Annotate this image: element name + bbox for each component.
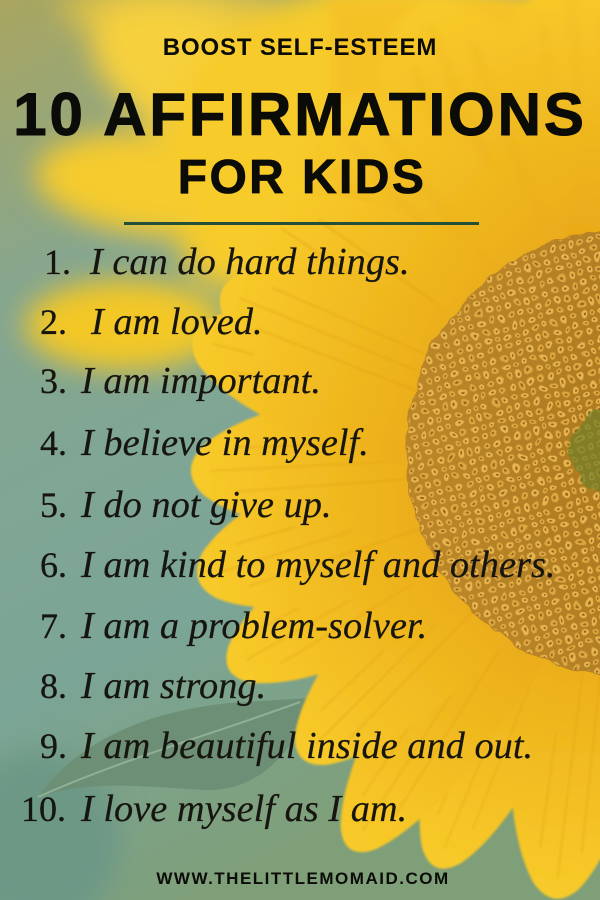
title line 1: 10 AFFIRMATIONS bbox=[13, 81, 587, 148]
item 5: 5. bbox=[40, 485, 67, 525]
item 3: 3. bbox=[40, 361, 67, 401]
item 7: 7. bbox=[40, 606, 67, 646]
front petals bbox=[175, 144, 600, 900]
title line 2: FOR KIDS bbox=[178, 151, 426, 204]
item 6: I am kind to myself and others. bbox=[81, 544, 555, 586]
item 3: I am important. bbox=[81, 360, 321, 402]
flower centre bbox=[406, 228, 600, 676]
item 6: 6. bbox=[40, 545, 67, 585]
subtitle: BOOST SELF-ESTEEM bbox=[163, 34, 437, 61]
item 8: I am strong. bbox=[81, 665, 266, 707]
divider bbox=[124, 222, 479, 225]
item 10: I love myself as I am. bbox=[81, 788, 407, 830]
item 1: 1. bbox=[44, 242, 71, 282]
item 10: 10. bbox=[21, 789, 66, 829]
website footer: WWW.THELITTLEMOMAID.COM bbox=[156, 869, 450, 888]
item 2: I am loved. bbox=[91, 301, 263, 343]
item 9: I am beautiful inside and out. bbox=[81, 725, 533, 767]
item 4: 4. bbox=[40, 423, 67, 463]
affirmations list bbox=[21, 241, 555, 830]
item 2: 2. bbox=[40, 302, 67, 342]
item 4: I believe in myself. bbox=[81, 422, 369, 464]
item 1: I can do hard things. bbox=[90, 241, 410, 283]
item 7: I am a problem-solver. bbox=[81, 605, 427, 647]
item 8: 8. bbox=[40, 666, 67, 706]
leaf bbox=[38, 698, 310, 797]
item 9: 9. bbox=[40, 726, 67, 766]
upper petals bbox=[252, 0, 600, 511]
item 5: I do not give up. bbox=[81, 484, 332, 526]
